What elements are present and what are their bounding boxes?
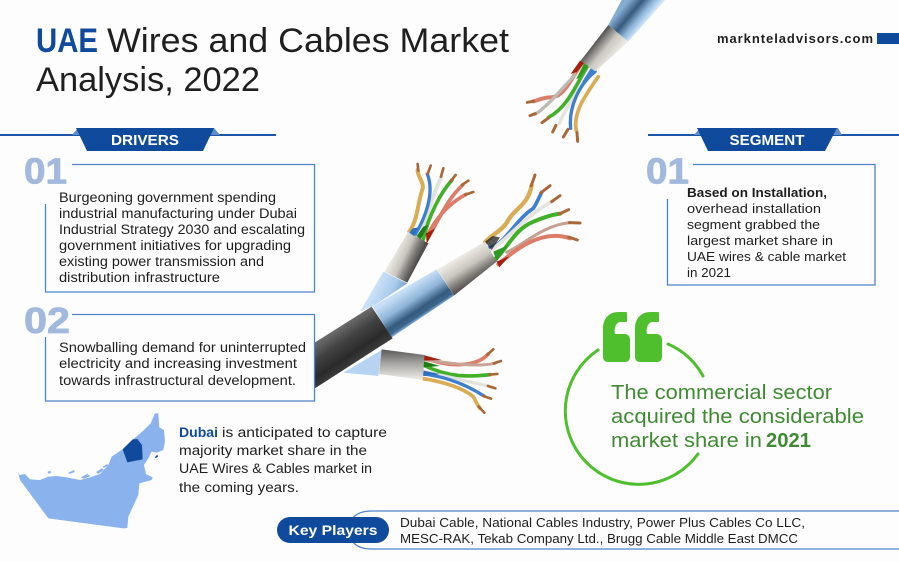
- cable jacket: black: [315, 307, 393, 388]
- brand: markntel advisors: marknteladvisors.com: [717, 31, 873, 46]
- badge: key players: [277, 517, 389, 543]
- cable branch: upper left wires: [360, 164, 473, 312]
- text: Dubai note: Dubai: [179, 425, 218, 440]
- text: driver 02: [59, 340, 306, 388]
- text: driver 02: electricity and increasing investment: [59, 356, 297, 371]
- illustration: top cable: [527, 0, 665, 141]
- cable branch: upper right wires: [485, 175, 580, 264]
- text: driver 01: distribution infrastructure: [59, 270, 220, 285]
- text: driver 01: Burgeoning government spending: [59, 190, 276, 205]
- panel: driver 02: [24, 300, 314, 401]
- text: company list: [400, 515, 805, 546]
- number: 02: 02: [24, 300, 70, 341]
- cable branch: lower wires: [343, 349, 501, 413]
- title: Wires and Cables Market: [107, 22, 510, 60]
- key players: [277, 511, 899, 549]
- text: Dubai note: the coming years.: [179, 480, 299, 495]
- text: company list: MESC-RAK, Tekab Company Ltd., Brugg Cable Middle East DMCC: [400, 531, 798, 546]
- section header: drivers: [0, 128, 276, 151]
- text: segment 01: UAE wires & cable market: [687, 249, 846, 264]
- text: segment 01: overhead installation: [687, 201, 821, 216]
- text: segment 01: Based on Installation,: [687, 185, 827, 200]
- text: Dubai note: UAE Wires & Cables market in: [179, 461, 372, 476]
- map: UAE with Dubai highlighted: [18, 413, 165, 528]
- text: segment 01: largest market share in: [687, 233, 833, 248]
- text: segment 01: segment grabbed the: [687, 217, 820, 232]
- section header: segment: SEGMENT: [730, 132, 804, 149]
- section header: drivers: DRIVERS: [111, 132, 179, 149]
- title: UAE: [36, 22, 98, 60]
- text: driver 02: Snowballing demand for uninterrupted: [59, 340, 306, 355]
- quote text: acquired the considerable: [611, 406, 864, 428]
- callout: commercial sector quote: [565, 312, 864, 484]
- text: driver 01: industrial manufacturing under Dubai: [59, 206, 297, 221]
- quote text: 2021: [766, 430, 811, 452]
- text: Dubai note: majority market share in the: [179, 443, 367, 458]
- text: driver 01: existing power transmission and: [59, 254, 264, 269]
- icon: quotation marks: [603, 312, 662, 362]
- ring: [565, 344, 703, 484]
- text: Dubai note: is anticipated to capture: [222, 425, 387, 440]
- text: company list: Dubai Cable, National Cables Industry, Power Plus Cables Co LLC,: [400, 515, 805, 530]
- text: segment 01: in 2021: [687, 265, 731, 280]
- quote text: market share in: [611, 430, 762, 452]
- title: [36, 22, 510, 99]
- number: 01: 01: [646, 150, 689, 192]
- title: Analysis, 2022: [36, 61, 260, 99]
- text: driver 01: Industrial Strategy 2030 and escalating: [59, 222, 305, 237]
- panel: driver 01: [24, 150, 314, 292]
- section header: segment: [648, 128, 899, 151]
- text: driver 02: towards infrastructural development.: [59, 373, 296, 388]
- text: driver 01: [59, 190, 305, 285]
- quote text: [611, 382, 864, 452]
- text: segment 01: [687, 185, 846, 280]
- text: driver 01: government initiatives for upgrading: [59, 238, 291, 253]
- text: Dubai note: [179, 425, 387, 495]
- badge: key players: Key Players: [288, 522, 378, 538]
- quote text: The commercial sector: [611, 382, 832, 404]
- number: 01: 01: [24, 150, 67, 192]
- illustration: central cable: [315, 164, 580, 413]
- panel: segment 01: [646, 150, 875, 285]
